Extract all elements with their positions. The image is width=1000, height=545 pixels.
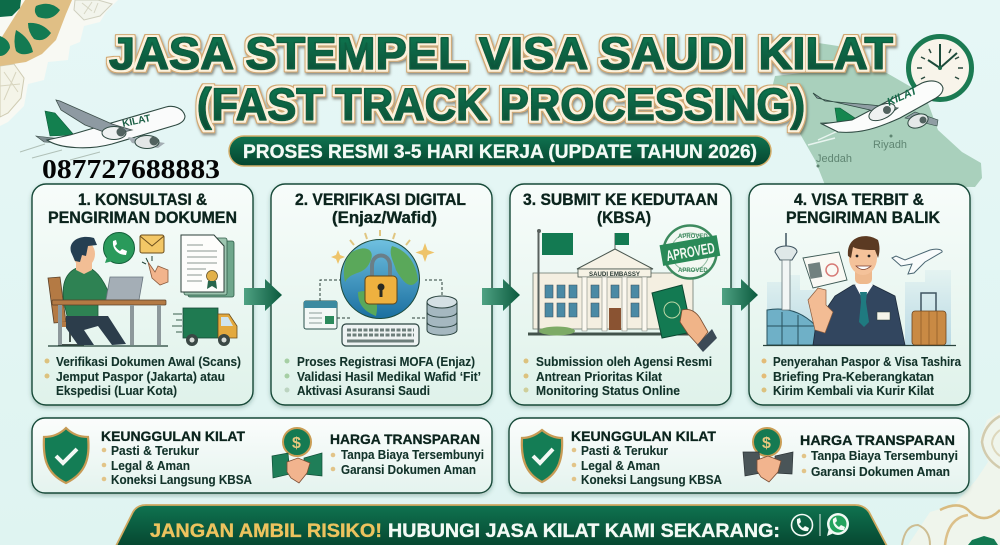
icon: passport in hand xyxy=(652,285,717,352)
text: keunggulan kilat: Pasti & Terukur xyxy=(581,444,668,458)
heading: step 3: 3. SUBMIT KE KEDUTAAN xyxy=(523,191,718,209)
list: step 1 xyxy=(44,355,241,398)
list: step 2: Validasi Hasil Medikal Wafid ‘Fit’ xyxy=(297,370,481,384)
icon: plane in sky xyxy=(892,249,942,274)
icon: documents xyxy=(181,235,234,297)
map: Saudi Arabia with city labels: Riyadh xyxy=(873,139,907,151)
heading: step 1: PENGIRIMAN DOKUMEN xyxy=(48,209,237,227)
heading: step 3 xyxy=(523,191,718,227)
text: keunggulan kilat: Legal & Aman xyxy=(111,459,190,473)
icon: left airplane xyxy=(20,100,185,160)
panel: benefits left xyxy=(32,418,492,493)
list: step 3: Monitoring Status Online xyxy=(536,384,680,398)
heading: step 3: (KBSA) xyxy=(597,209,651,227)
list: step 3 xyxy=(524,355,712,398)
icon: approved stamp: APROVED xyxy=(665,240,716,265)
illustration: airport skyline and tower xyxy=(763,233,956,346)
text: keunggulan kilat: Legal & Aman xyxy=(581,459,660,473)
heading: step 4: 4. VISA TERBIT & xyxy=(794,191,924,209)
icon: suitcase xyxy=(912,293,946,345)
text: keunggulan kilat xyxy=(571,428,722,487)
icon: keyboard xyxy=(342,324,419,346)
title: JASA STEMPEL VISA SAUDI KILAT xyxy=(109,28,893,79)
list: step 1: Verifikasi Dokumen Awal (Scans) xyxy=(56,355,241,369)
list: step 1: Jemput Paspor (Jakarta) atau xyxy=(56,370,225,384)
title xyxy=(109,28,893,130)
icon: shield xyxy=(522,430,562,482)
list: step 3: Antrean Prioritas Kilat xyxy=(536,370,663,384)
text: harga transparan: Garansi Dokumen Aman xyxy=(811,465,950,479)
list: step 2 xyxy=(284,355,481,398)
illustration: saudi embassy building: SAUDI EMBASSY xyxy=(589,271,641,278)
heading: step 2: (Enjaz/Wafid) xyxy=(332,209,437,227)
icon: coin and handshake: $ xyxy=(762,435,771,452)
list: step 4: Penyerahan Paspor & Visa Tashira xyxy=(773,355,962,369)
title: (FAST TRACK PROCESSING) xyxy=(197,79,805,130)
list: step 4: Kirim Kembali via Kurir Kilat xyxy=(773,384,935,398)
ornament: bottom right islamic corner xyxy=(902,412,1000,545)
icon: left airplane: KILAT xyxy=(121,113,152,130)
icon: coin and handshake xyxy=(743,428,793,482)
icon: whatsapp xyxy=(104,232,134,264)
map: Saudi Arabia with city labels xyxy=(772,42,982,187)
icon: clock xyxy=(908,36,972,100)
list: step 2: Proses Registrasi MOFA (Enjaz) xyxy=(297,355,475,369)
call to action banner xyxy=(115,505,888,545)
text: warning: JANGAN AMBIL RISIKO! xyxy=(150,520,382,542)
illustration: agent holding visa xyxy=(803,236,905,345)
list: step 2: Aktivasi Asuransi Saudi xyxy=(297,384,430,398)
illustration: saudi embassy building xyxy=(528,229,693,336)
icon: secure browser window xyxy=(304,280,442,329)
text: harga transparan: HARGA TRANSPARAN xyxy=(800,432,955,448)
text: keunggulan kilat: KEUNGGULAN KILAT xyxy=(101,428,245,444)
icon: approved stamp: APROVED xyxy=(678,268,708,274)
icon: approved stamp xyxy=(660,226,720,278)
icon: telephone xyxy=(792,514,812,536)
text: harga transparan: Tanpa Biaya Tersembunyi xyxy=(811,449,958,463)
arrow: step 3 to 4 xyxy=(722,279,758,311)
text: harga transparan: HARGA TRANSPARAN xyxy=(330,431,480,447)
text: harga transparan xyxy=(800,432,958,479)
icon: shield xyxy=(44,428,89,483)
text: keunggulan kilat: Koneksi Langsung KBSA xyxy=(111,473,252,487)
arrow: step 2 to 3 xyxy=(482,279,520,311)
icon: approved stamp: APROVED xyxy=(678,234,708,240)
ornament: top left islamic corner xyxy=(0,0,118,126)
text: harga transparan: Tanpa Biaya Tersembunyi xyxy=(341,448,484,462)
heading: step 2: 2. VERIFIKASI DIGITAL xyxy=(295,191,466,209)
arrow: step 1 to 2 xyxy=(244,279,282,311)
icon: envelope xyxy=(140,235,164,253)
heading: step 1: 1. KONSULTASI & xyxy=(78,191,207,209)
list: step 1: Ekspedisi (Luar Kota) xyxy=(56,384,177,398)
icon: right airplane: KILAT xyxy=(885,84,920,109)
divider xyxy=(819,514,821,536)
icon: whatsapp xyxy=(827,513,849,536)
phone number: 087727688883 xyxy=(42,154,220,184)
text: harga transparan: Garansi Dokumen Aman xyxy=(341,463,476,477)
icon: database xyxy=(427,296,457,335)
text: keunggulan kilat: KEUNGGULAN KILAT xyxy=(571,428,716,444)
list: step 4 xyxy=(762,355,962,398)
icon: delivery truck xyxy=(172,308,237,346)
heading: step 2 xyxy=(295,191,466,227)
panel: step 3 xyxy=(510,184,731,405)
icon: coin and handshake: $ xyxy=(292,435,301,452)
panel: benefits right xyxy=(509,418,969,493)
text: keunggulan kilat: Pasti & Terukur xyxy=(111,444,199,458)
panel: step 1 xyxy=(32,184,253,405)
icon: coin and handshake xyxy=(272,428,322,483)
list: step 3: Submission oleh Agensi Resmi xyxy=(536,355,712,369)
icon: pointing hand xyxy=(142,256,168,285)
text: contact prompt: HUBUNGI JASA KILAT KAMI SEKARANG: xyxy=(388,520,780,542)
text: keunggulan kilat: Koneksi Langsung KBSA xyxy=(581,473,722,487)
icon: right airplane xyxy=(808,81,943,145)
text: harga transparan xyxy=(330,431,484,477)
list: step 4: Briefing Pra-Keberangkatan xyxy=(773,370,934,384)
text: keunggulan kilat xyxy=(101,428,252,487)
heading: step 1 xyxy=(48,191,237,227)
heading: step 4: PENGIRIMAN BALIK xyxy=(786,209,940,227)
subtitle pill: PROSES RESMI 3-5 HARI KERJA (UPDATE TAHUN 2026) xyxy=(243,141,757,163)
heading: step 4 xyxy=(786,191,940,227)
illustration: globe with padlock xyxy=(331,230,434,318)
map: Saudi Arabia with city labels: Jeddah xyxy=(816,153,852,165)
panel: step 2 xyxy=(271,184,492,405)
panel: step 4 xyxy=(749,184,970,405)
illustration: person at laptop xyxy=(48,237,168,346)
